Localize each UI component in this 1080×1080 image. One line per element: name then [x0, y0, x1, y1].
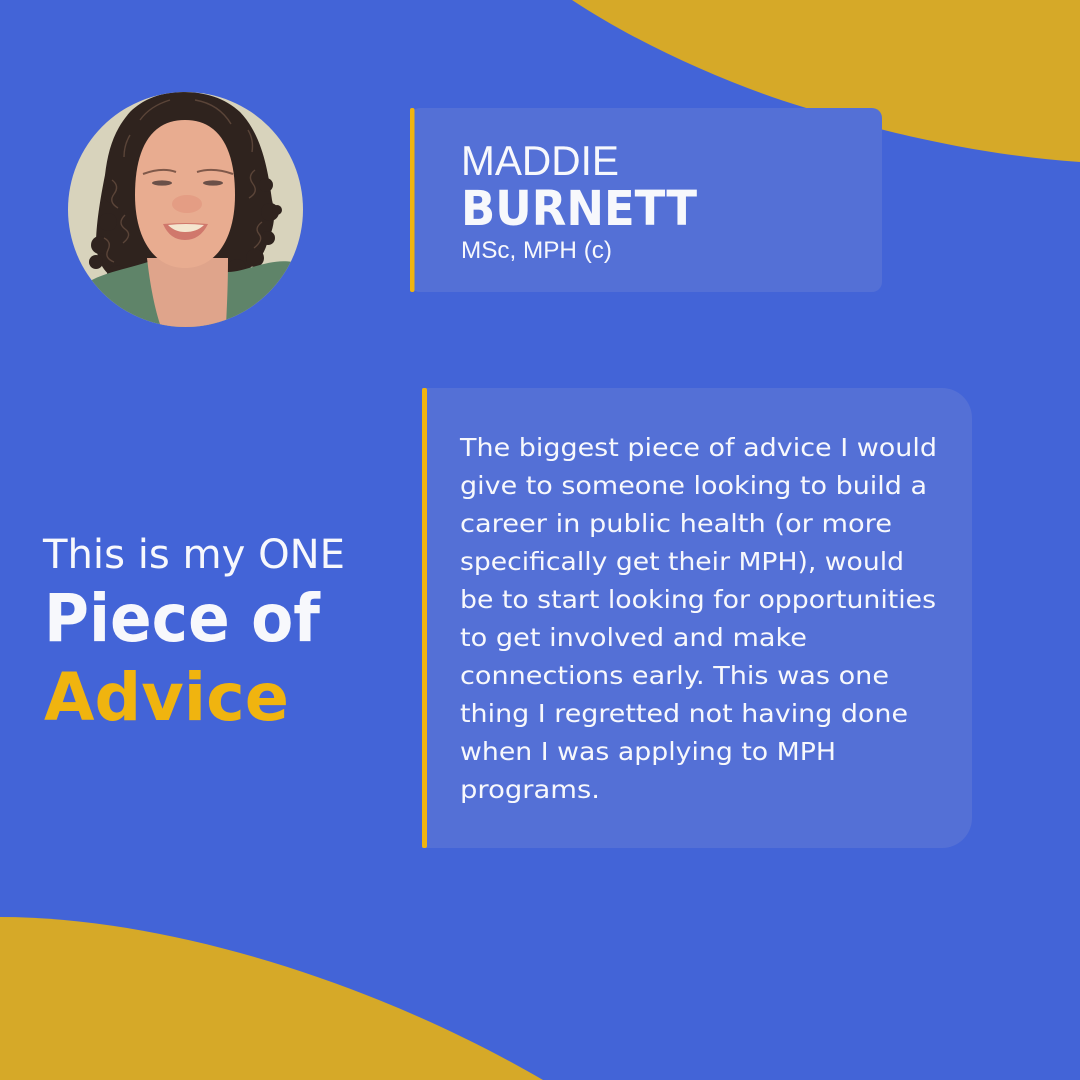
- advice body text: specifically get their MPH), would: [460, 547, 904, 576]
- decorative wave: top right: [572, 0, 1080, 162]
- credentials: MSc, MPH (c): [461, 237, 612, 264]
- portrait photo illustration: [68, 92, 303, 327]
- panel: name card: [410, 108, 882, 292]
- advice body text: thing I regretted not having done: [460, 699, 908, 728]
- neck and chest: [147, 258, 228, 327]
- heading line: Piece of: Piece of: [44, 580, 321, 657]
- hair: [89, 92, 282, 285]
- face: [135, 120, 235, 268]
- name card accent bar: [410, 108, 414, 292]
- panel: advice quote: [422, 388, 972, 848]
- blouse: [92, 261, 291, 327]
- hair highlights: [104, 100, 262, 262]
- advice body text: when I was applying to MPH: [460, 737, 836, 766]
- decorative wave: bottom left: [0, 917, 543, 1080]
- advice panel accent bar: [422, 388, 427, 848]
- advice body text: give to someone looking to build a: [460, 471, 927, 500]
- advice body text: programs.: [460, 775, 600, 804]
- advice body text: connections early. This was one: [460, 661, 889, 690]
- advice body text: be to start looking for opportunities: [460, 585, 936, 614]
- name: first: MADDIE: [461, 137, 619, 184]
- heading: [42, 532, 345, 736]
- name: last: BURNETT: [461, 181, 697, 237]
- advice panel background: [422, 388, 972, 848]
- advice body text: career in public health (or more: [460, 509, 892, 538]
- advice body text: to get involved and make: [460, 623, 807, 652]
- heading line: Advice: Advice: [44, 659, 289, 736]
- advice body text: The biggest piece of advice I would: [459, 433, 937, 462]
- heading line: This is my ONE: This is my ONE: [42, 532, 345, 578]
- advice body text: [459, 433, 937, 804]
- eyes: [152, 180, 172, 186]
- name card background: [410, 108, 882, 292]
